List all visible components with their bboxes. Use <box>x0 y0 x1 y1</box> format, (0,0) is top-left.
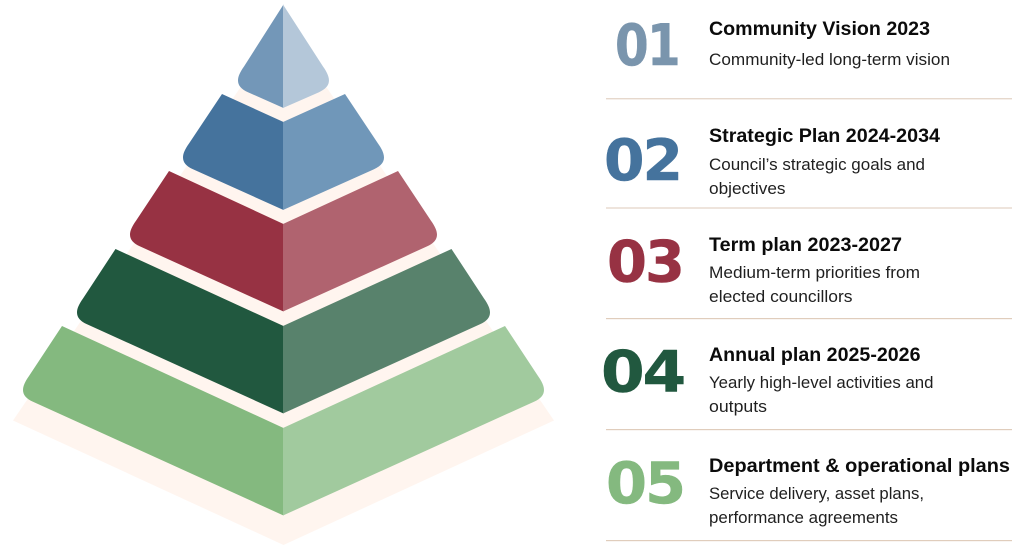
row 05 <box>606 451 1010 527</box>
description 03: Medium-term priorities from <box>709 264 920 282</box>
description 05: Service delivery, asset plans, <box>709 485 924 503</box>
row 01 <box>615 13 950 79</box>
tier 3: term plan <box>130 171 437 312</box>
description 01: Community-led long-term vision <box>709 51 950 69</box>
heading 05: Department & operational plans <box>709 456 1010 477</box>
row 02 <box>604 126 940 198</box>
pyramid <box>13 4 554 545</box>
description 03 <box>709 264 920 306</box>
description 02: objectives <box>709 180 786 198</box>
number 01: 01 <box>615 13 679 79</box>
heading 02: Strategic Plan 2024-2034 <box>709 126 940 147</box>
description 03: elected councillors <box>709 288 852 306</box>
description 04: outputs <box>709 398 767 416</box>
pyramid backdrop shadow <box>13 60 554 545</box>
tier 4: annual plan <box>77 249 490 414</box>
tier 1: community vision <box>238 4 329 108</box>
heading 01: Community Vision 2023 <box>709 19 930 40</box>
description 04 <box>709 374 934 416</box>
description 02: Council’s strategic goals and <box>709 156 925 174</box>
tier 5: department and operational plans <box>23 326 544 516</box>
description 04: Yearly high-level activities and <box>709 374 934 392</box>
description 05 <box>709 485 924 527</box>
heading 04: Annual plan 2025-2026 <box>709 345 920 366</box>
number 02: 02 <box>604 128 681 194</box>
number 03: 03 <box>607 230 683 296</box>
row 04 <box>601 340 934 416</box>
number 05: 05 <box>606 451 684 517</box>
tier 2: strategic plan <box>183 94 384 210</box>
number 04: 04 <box>601 340 684 406</box>
description 02 <box>709 156 925 198</box>
description 05: performance agreements <box>709 509 898 527</box>
row 03 <box>607 230 920 306</box>
heading 03: Term plan 2023-2027 <box>709 235 902 256</box>
